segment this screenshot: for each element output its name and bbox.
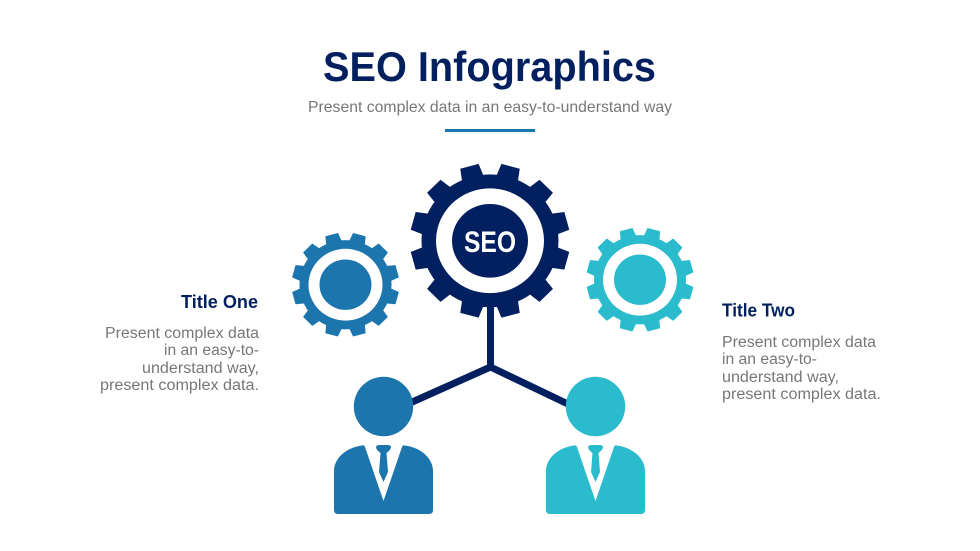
title: SEO Infographics — [323, 43, 656, 90]
text block: title one — [100, 292, 259, 394]
icon: left blue gear — [292, 233, 399, 337]
subtitle: Present complex data in an easy-to-understand way — [308, 99, 672, 116]
body: title two description: Present complex data — [722, 334, 876, 351]
text block: title two — [722, 300, 881, 403]
heading: title one: Title One — [181, 292, 258, 312]
icon: left businessperson — [334, 377, 433, 514]
body: title two description: present complex data. — [722, 386, 881, 403]
body: title one description: understand way, — [142, 360, 259, 377]
connector lines — [410, 305, 570, 405]
icon: large SEO gear: SEO — [464, 226, 516, 259]
body: title two description: in an easy-to- — [722, 351, 817, 368]
body: title two description — [722, 334, 881, 403]
title underline — [445, 129, 535, 132]
body: title one description: present complex data. — [100, 377, 259, 394]
icon: right teal gear — [586, 228, 694, 332]
icon: large SEO gear — [410, 164, 570, 318]
body: title one description — [100, 325, 259, 394]
icon: right businessperson — [546, 377, 645, 514]
body: title one description: Present complex data — [105, 325, 259, 342]
body: title two description: understand way, — [722, 369, 839, 386]
heading: title two: Title Two — [722, 300, 795, 320]
body: title one description: in an easy-to- — [164, 342, 259, 359]
